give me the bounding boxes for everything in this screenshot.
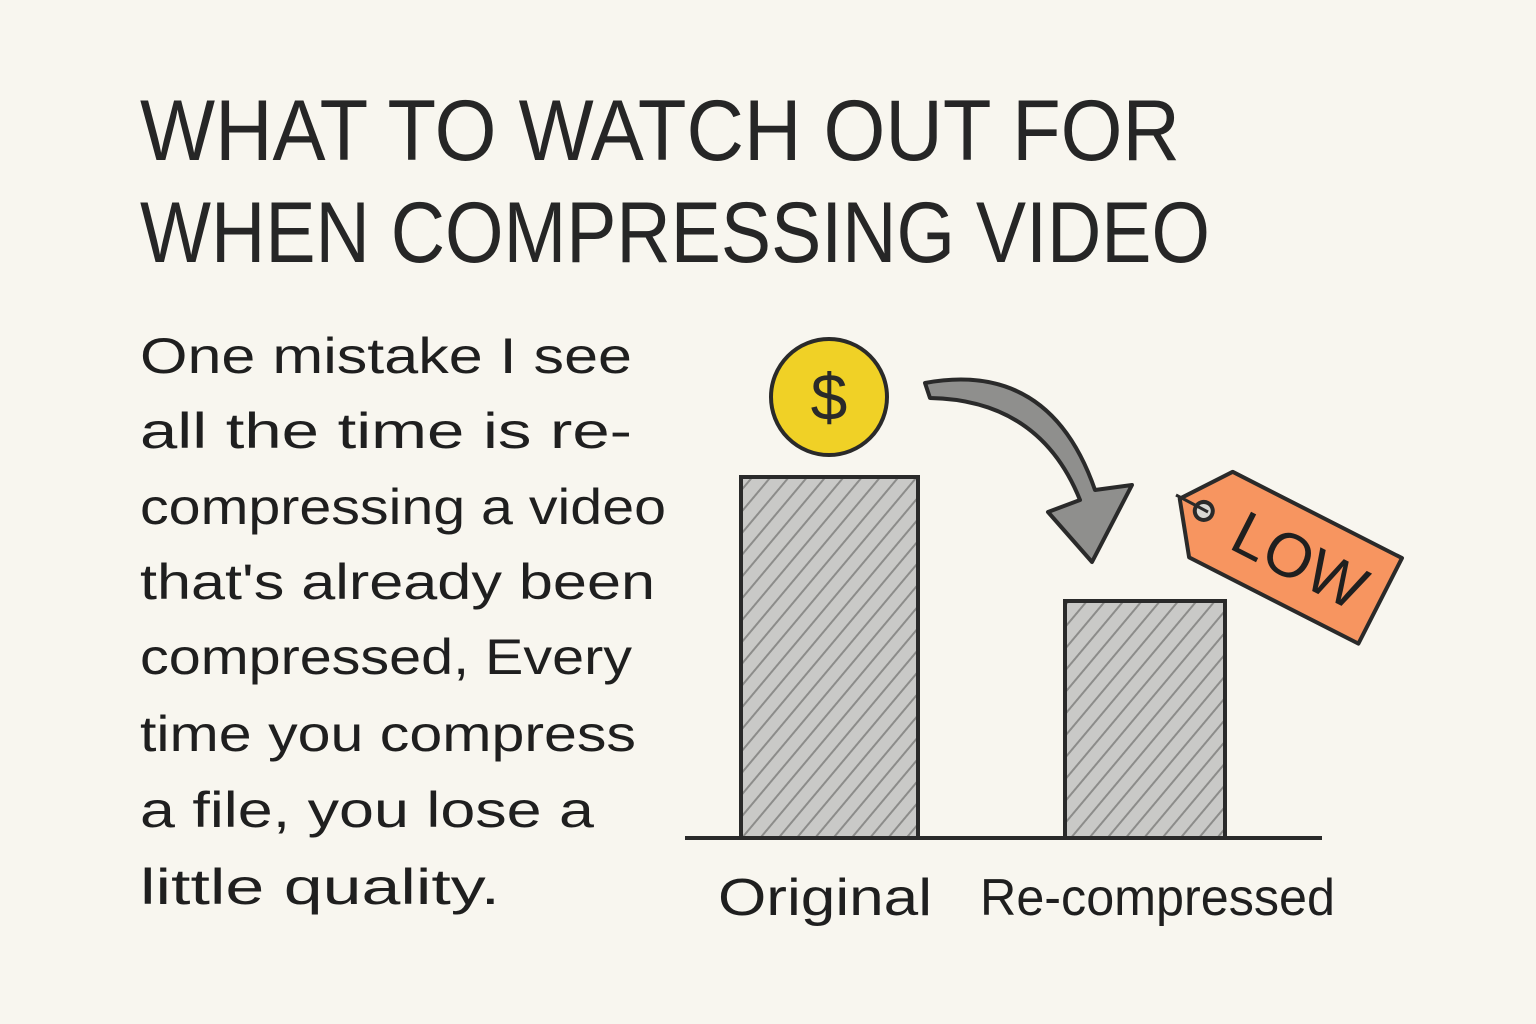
title: WHAT TO WATCH OUT FOR <box>140 83 1180 179</box>
bar: re-compressed <box>1065 601 1225 838</box>
body text: little quality. <box>140 859 500 915</box>
body text: all the time is re- <box>140 403 632 459</box>
arrow <box>925 380 1132 562</box>
axis line <box>685 836 1322 840</box>
labels: Re-compressed <box>980 869 1335 927</box>
body text: compressing a video <box>140 479 666 535</box>
title <box>140 83 1210 281</box>
tag: LOW: LOW <box>1221 499 1378 624</box>
body text: time you compress <box>140 706 636 762</box>
body text <box>140 328 666 915</box>
body text: One mistake I see <box>140 328 632 384</box>
body text: compressed, Every <box>140 629 632 685</box>
icon: coin: $ <box>811 360 847 434</box>
title: WHEN COMPRESSING VIDEO <box>140 185 1210 281</box>
labels: Original <box>718 869 932 927</box>
labels <box>718 869 1335 927</box>
body text: that's already been <box>140 554 655 610</box>
bar: original <box>741 477 918 838</box>
tag: LOW <box>1158 456 1402 644</box>
bar chart <box>685 477 1322 838</box>
body text: a file, you lose a <box>140 782 594 838</box>
string of tag <box>1176 495 1208 512</box>
icon: coin <box>771 339 887 455</box>
